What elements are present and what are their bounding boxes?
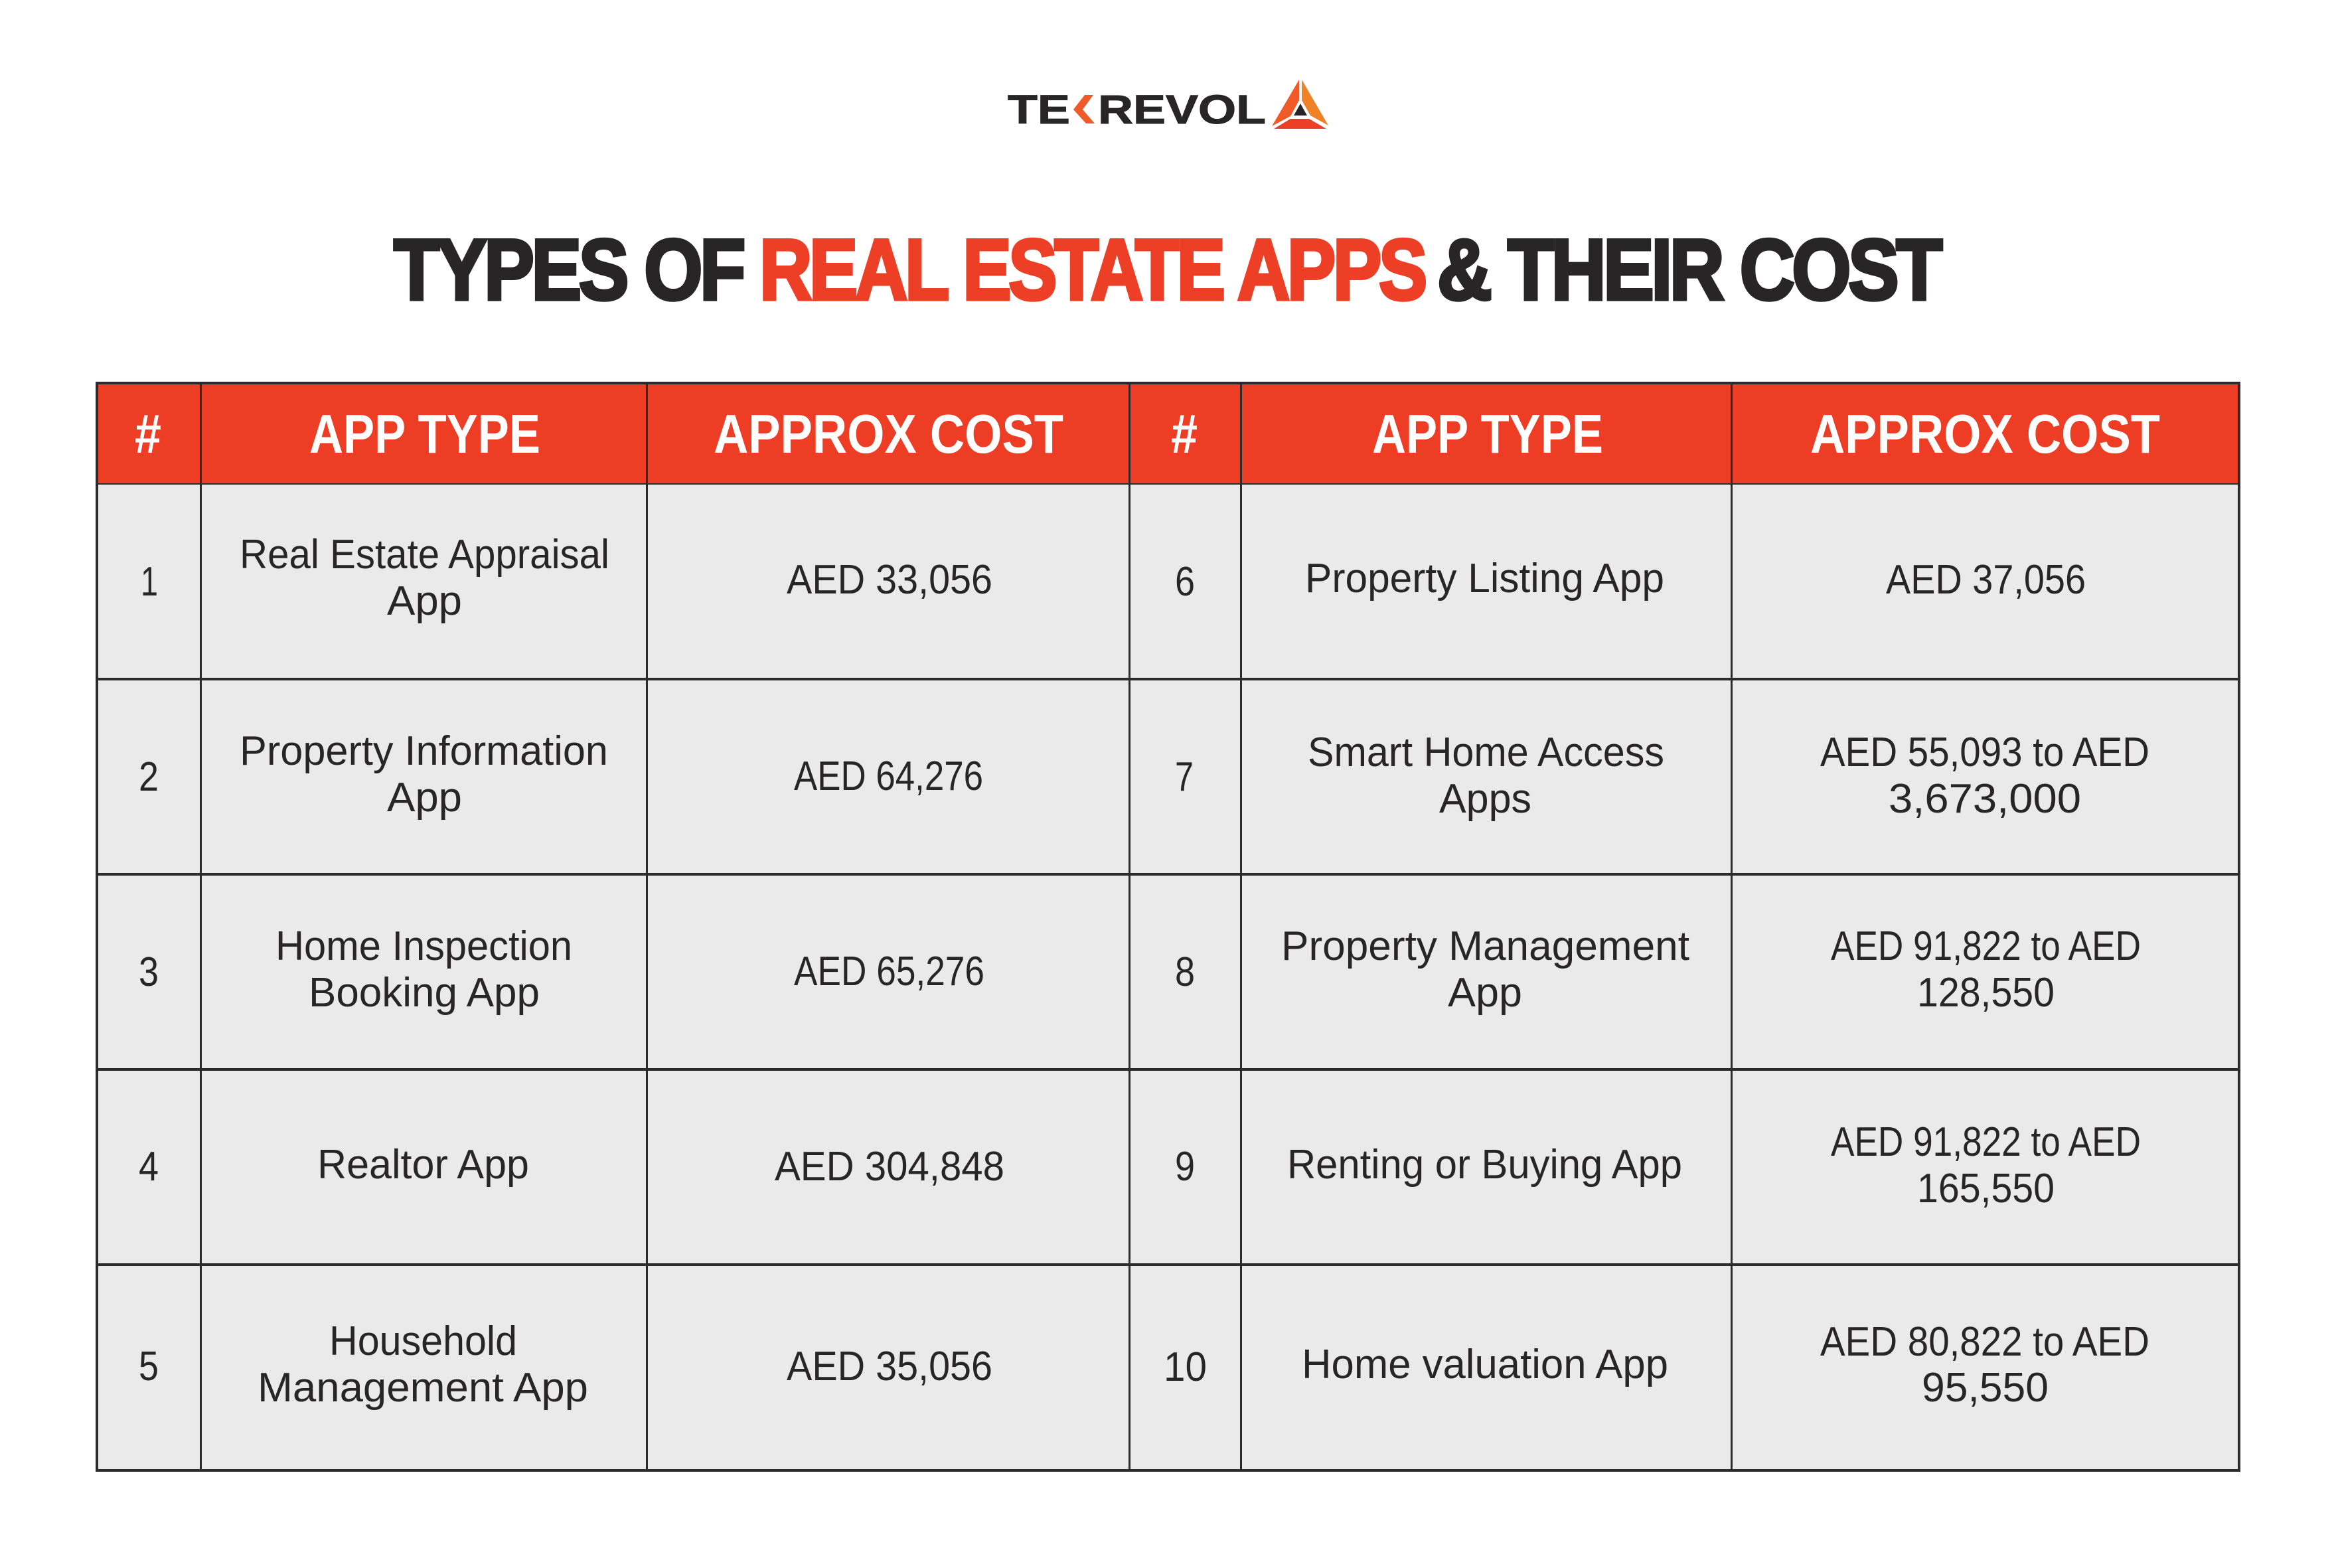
row 3: App <box>1448 970 1522 1016</box>
table grid lines <box>96 382 2240 1472</box>
row 3: Property Management <box>1281 923 1689 969</box>
row 5 <box>139 1318 2149 1411</box>
row 3: Booking App <box>309 970 540 1016</box>
table <box>96 382 2240 1472</box>
header row: # <box>1171 403 1198 465</box>
title: REAL ESTATE APPS <box>759 221 1425 318</box>
row 4: 165,550 <box>1917 1166 2055 1212</box>
header row: APPROX COST <box>714 403 1063 465</box>
row 2: App <box>387 775 462 821</box>
row 2: Apps <box>1439 776 1531 822</box>
row 4: AED 304,848 <box>775 1144 1004 1190</box>
row 4: AED 91,822 to AED <box>1831 1119 2141 1165</box>
row 2: 3,673,000 <box>1889 776 2081 822</box>
row 4 <box>139 1119 2141 1212</box>
row 5: Household <box>329 1318 517 1364</box>
row 1: Real Estate Appraisal <box>240 532 609 578</box>
row 2: Smart Home Access <box>1308 730 1664 775</box>
header row: # <box>135 403 161 465</box>
row 2 <box>139 728 2149 822</box>
row 3: AED 65,276 <box>794 949 984 994</box>
row 5: 5 <box>139 1344 159 1389</box>
row 2: AED 64,276 <box>794 753 983 799</box>
row 5: AED 80,822 to AED <box>1820 1319 2149 1365</box>
row 1: App <box>387 578 462 624</box>
row 5: 10 <box>1164 1344 1207 1390</box>
row 5: 95,550 <box>1922 1365 2049 1411</box>
row 3: 8 <box>1175 949 1195 995</box>
row 1: AED 37,056 <box>1886 557 2086 603</box>
header row <box>135 403 2160 465</box>
table body background <box>97 484 2239 1470</box>
row 2: Property Information <box>240 728 608 774</box>
row 2: 2 <box>139 754 159 800</box>
row 4: Realtor App <box>317 1142 529 1188</box>
row 3: 3 <box>139 949 159 995</box>
logo: Tekrevol: REVOL <box>1098 87 1266 132</box>
table header background <box>97 383 2239 484</box>
row 3: Home Inspection <box>275 923 572 969</box>
row 4: Renting or Buying App <box>1287 1142 1682 1188</box>
row 5: Management App <box>258 1365 588 1411</box>
row 2: AED 55,093 to AED <box>1820 730 2149 775</box>
title: & THEIR COST <box>1437 221 1942 318</box>
header row: APP TYPE <box>309 403 540 465</box>
header row: APPROX COST <box>1810 403 2160 465</box>
row 1 <box>141 532 2086 624</box>
row 3: 128,550 <box>1917 970 2055 1016</box>
row 4: 9 <box>1175 1144 1195 1190</box>
header row: APP TYPE <box>1372 403 1603 465</box>
title <box>394 221 1942 318</box>
row 1: 1 <box>141 559 158 605</box>
row 2: 7 <box>1175 754 1194 800</box>
row 5: AED 35,056 <box>787 1344 992 1389</box>
row 5: Home valuation App <box>1302 1342 1668 1387</box>
logo: Tekrevol <box>1008 80 1328 132</box>
row 1: Property Listing App <box>1305 556 1664 601</box>
row 4: 4 <box>139 1144 159 1190</box>
row 3 <box>139 923 2141 1016</box>
row 3: AED 91,822 to AED <box>1831 923 2141 969</box>
title: TYPES OF <box>394 221 743 318</box>
row 1: 6 <box>1175 559 1195 605</box>
logo: Tekrevol: TE <box>1008 87 1070 132</box>
row 1: AED 33,056 <box>787 557 992 603</box>
